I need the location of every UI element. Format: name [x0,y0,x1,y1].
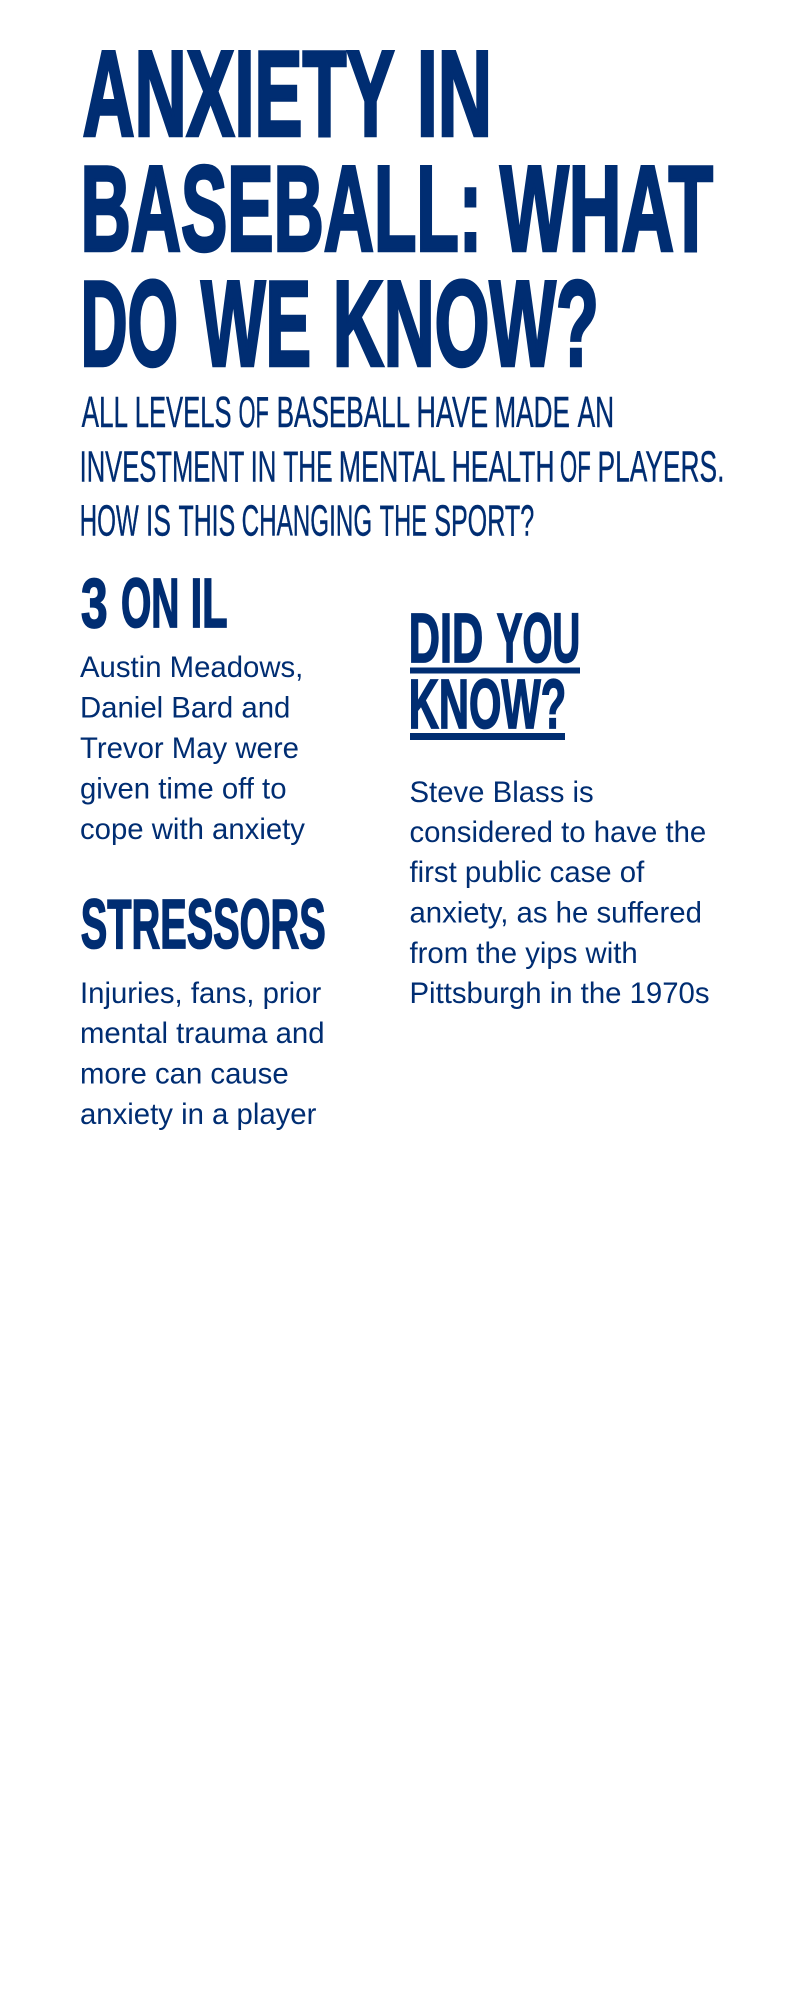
title: BASEBALL: [81,140,482,276]
title: DO [81,255,178,391]
text block: did you know body: Steve Blass is [410,776,594,809]
subtitle: INVESTMENT [80,444,244,492]
heading: did you know: KNOW? [409,665,566,743]
subtitle: MADE [494,389,570,437]
subtitle: HOW [80,498,139,546]
subtitle: THIS [178,498,235,546]
panel: 3 on IL [80,564,305,846]
text block: did you know body: anxiety, as he suffered [410,896,702,930]
text block: did you know body: from the yips with [410,937,638,970]
subtitle: LEVELS [135,389,232,437]
subtitle: IN [251,444,276,492]
text block: stressors body: mental trauma and [80,1017,325,1050]
text block: 3 on IL body [80,651,305,846]
subtitle: BASEBALL [277,389,410,437]
heading: 3 on IL: IL [191,564,228,642]
text block: 3 on IL body: given time off to [80,772,286,806]
text block: did you know body: first public case of [410,856,645,889]
heading: 3 on IL: ON [121,564,179,642]
subtitle: THE [283,444,333,492]
subtitle: AN [578,389,614,437]
heading: did you know: DID [409,599,483,677]
text block: 3 on IL body: Daniel Bard and [80,692,290,724]
subtitle: ALL [82,389,128,437]
text block: did you know body: considered to have the [410,816,706,849]
title: WE [201,255,311,391]
subtitle: MENTAL [339,444,445,492]
subtitle: HAVE [416,389,488,437]
text block: stressors body: more can cause [80,1058,289,1090]
text block: 3 on IL body: cope with anxiety [80,813,305,846]
subtitle: IS [146,498,171,546]
heading: did you know [409,599,580,743]
subtitle: SPORT? [434,498,534,546]
text block: stressors body: anxiety in a player [80,1098,317,1131]
panel: stressors [80,885,326,1131]
panel: did you know [409,599,710,1010]
subtitle: PLAYERS. [598,444,724,492]
text block: stressors body [80,977,325,1131]
subtitle: OF [560,444,591,492]
subtitle [80,389,724,546]
text block: did you know body [410,776,710,1010]
subtitle: OF [238,389,269,437]
title [81,25,713,391]
heading: did you know: YOU [497,599,580,677]
subtitle: CHANGING [242,498,372,546]
text block: did you know body: Pittsburgh in the 1970s [410,977,710,1010]
heading: stressors: STRESSORS [81,885,326,963]
subtitle: HEALTH [452,444,555,492]
text block: stressors body: Injuries, fans, prior [80,977,321,1010]
title: ANXIETY [83,25,394,161]
text block: 3 on IL body: Trevor May were [80,732,299,765]
heading: 3 on IL: 3 [81,564,108,642]
text block: 3 on IL body: Austin Meadows, [80,651,303,684]
title: IN [417,25,492,161]
title: KNOW? [333,255,599,391]
subtitle: THE [380,498,427,546]
